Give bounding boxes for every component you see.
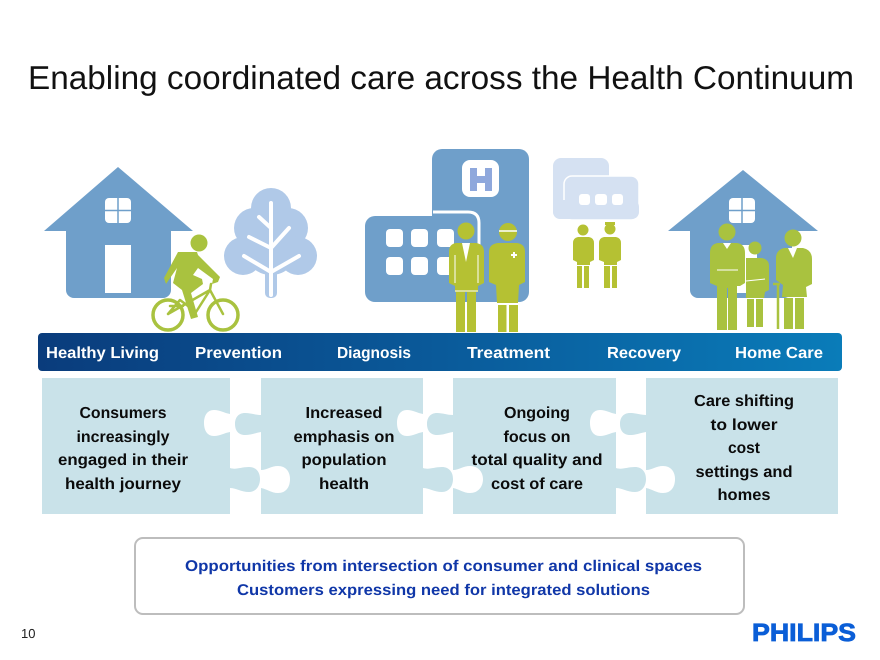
title: Enabling coordinated care across the Health Continuum (28, 59, 854, 96)
puzzle piece 4: cost (728, 440, 761, 457)
puzzle piece 3 (453, 378, 616, 514)
puzzle piece 4 (646, 378, 838, 514)
puzzle piece 1: Consumers (80, 405, 167, 422)
stage bar: Treatment (467, 345, 551, 362)
puzzle piece 2 (261, 378, 423, 514)
puzzle piece 2: health (319, 476, 369, 493)
logo: Philips wordmark: PHILIPS (752, 619, 856, 647)
icon: tree (224, 188, 317, 298)
icon: hospital with doctors (365, 149, 529, 332)
stage bar: Healthy Living (46, 345, 159, 362)
stage bar: Prevention (195, 345, 282, 362)
stage bar (38, 333, 842, 371)
puzzle piece 1: health journey (65, 476, 181, 493)
puzzle piece 4: settings and (696, 464, 792, 481)
icon: speech bubbles with clinicians (553, 158, 639, 288)
callout: Customers expressing need for integrated solutions (237, 582, 650, 599)
page number: 10 (21, 626, 35, 641)
puzzle piece 3: cost of care (491, 476, 583, 493)
icon: house with family (668, 170, 818, 330)
callout: Opportunities from intersection of consumer and clinical spaces (185, 558, 702, 575)
icon: surgeon (489, 223, 525, 332)
stage bar: Recovery (607, 345, 681, 362)
puzzle piece 2: Increased (306, 405, 382, 422)
puzzle piece 4: Care shifting (694, 393, 794, 410)
puzzle piece 3: Ongoing (504, 405, 570, 422)
puzzle piece 3: total quality and (472, 452, 602, 469)
icon: family (710, 224, 812, 330)
puzzle piece 1: engaged in their (58, 452, 188, 469)
icon: house with cyclist (44, 167, 238, 330)
stage bar: Home Care (735, 345, 823, 362)
puzzle piece 1 (42, 378, 230, 514)
puzzle piece 4: to lower (710, 417, 778, 434)
icon: cyclist (153, 234, 238, 330)
stage bar: Diagnosis (337, 345, 411, 362)
icon: doctor (449, 222, 484, 332)
puzzle piece 1: increasingly (76, 429, 170, 446)
puzzle connectors: white sockets (204, 410, 675, 493)
puzzle piece 4: homes (718, 487, 771, 504)
callout (135, 538, 744, 614)
puzzle piece 3: focus on (504, 429, 570, 446)
puzzle piece 2: population (302, 452, 386, 469)
puzzle strip (42, 378, 838, 514)
puzzle connectors: tabs (230, 413, 646, 492)
puzzle piece 2: emphasis on (294, 429, 394, 446)
